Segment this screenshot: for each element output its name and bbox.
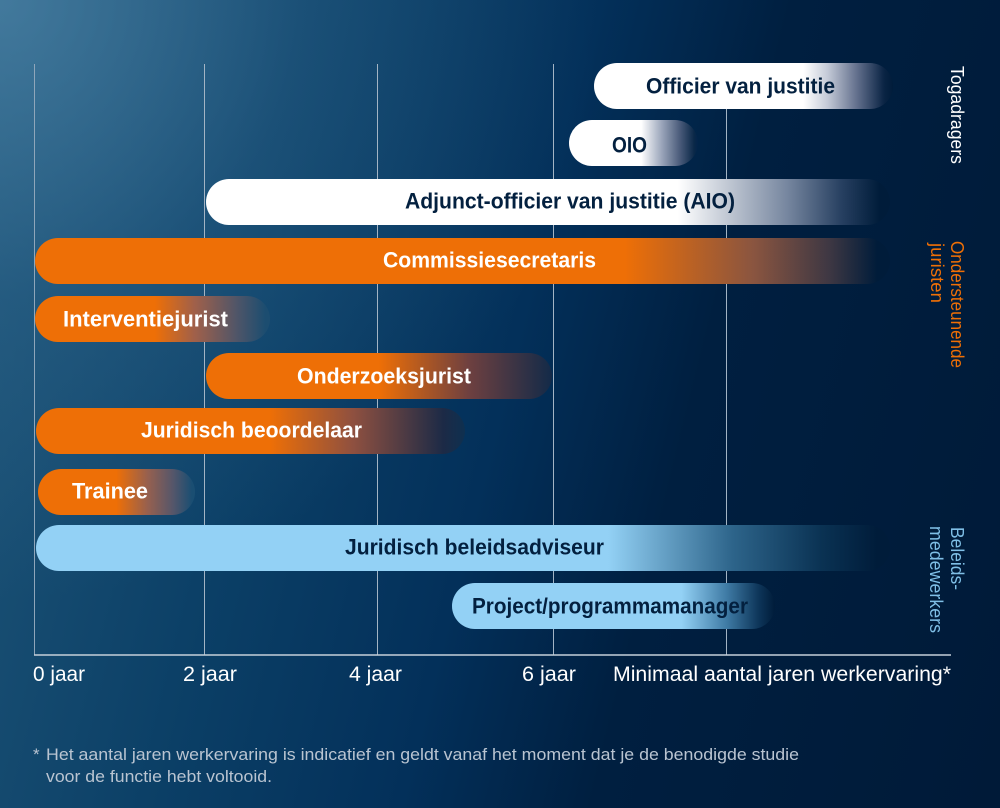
bar: Juridisch beoordelaar [36,408,465,454]
bar: Juridisch beoordelaar: Juridisch beoordelaar [141,418,362,442]
axis labels: 2 jaar [183,662,237,686]
bar: Project/programmamanager: Project/programmamanager [472,594,748,618]
bar: Officier van justitie [594,63,893,109]
axis labels [33,662,952,686]
bar: Interventiejurist: Interventiejurist [63,306,228,332]
side label: Ondersteunende juristen: juristen [927,242,947,303]
bar: Project/programmamanager [452,583,775,629]
axis labels: 0 jaar [33,662,85,686]
axis labels: 4 jaar [349,662,402,686]
bar: OIO: OIO [612,132,647,158]
bar: Onderzoeksjurist [206,353,552,399]
bar: Trainee: Trainee [72,478,148,504]
chart grid and axis [34,64,951,655]
bar: Commissiesecretaris [35,238,890,284]
axis labels: 6 jaar [522,662,576,686]
bar: Onderzoeksjurist: Onderzoeksjurist [297,364,471,388]
footnote: voor de functie hebt voltooid. [46,767,272,786]
bar: Juridisch beleidsadviseur: Juridisch beleidsadviseur [345,534,604,560]
side label: Beleidsmedewerkers: Beleids- [947,527,967,590]
bar: Juridisch beleidsadviseur [36,525,890,571]
footnote: Het aantal jaren werkervaring is indicatief en geldt vanaf het moment dat je de benodigde studie [46,745,799,764]
footnote: * [33,745,40,764]
bar: Trainee [38,469,195,515]
side label: Ondersteunende juristen [927,241,967,368]
bar: Commissiesecretaris: Commissiesecretaris [383,248,596,272]
bar: Adjunct-officier van justitie (AIO): Adjunct-officier van justitie (AIO) [405,188,735,214]
side label: Ondersteunende juristen: Ondersteunende [947,241,967,368]
bar: Interventiejurist [35,296,270,342]
side label: Togadragers: Togadragers [947,66,967,164]
bar: Officier van justitie: Officier van justitie [646,74,835,98]
footnote [33,745,799,786]
bar: Adjunct-officier van justitie (AIO) [206,179,890,225]
bar: OIO [569,120,698,166]
axis labels: Minimaal aantal jaren werkervaring* [613,662,952,686]
side label: Beleidsmedewerkers [926,526,967,633]
side label: Beleidsmedewerkers: medewerkers [926,526,946,633]
